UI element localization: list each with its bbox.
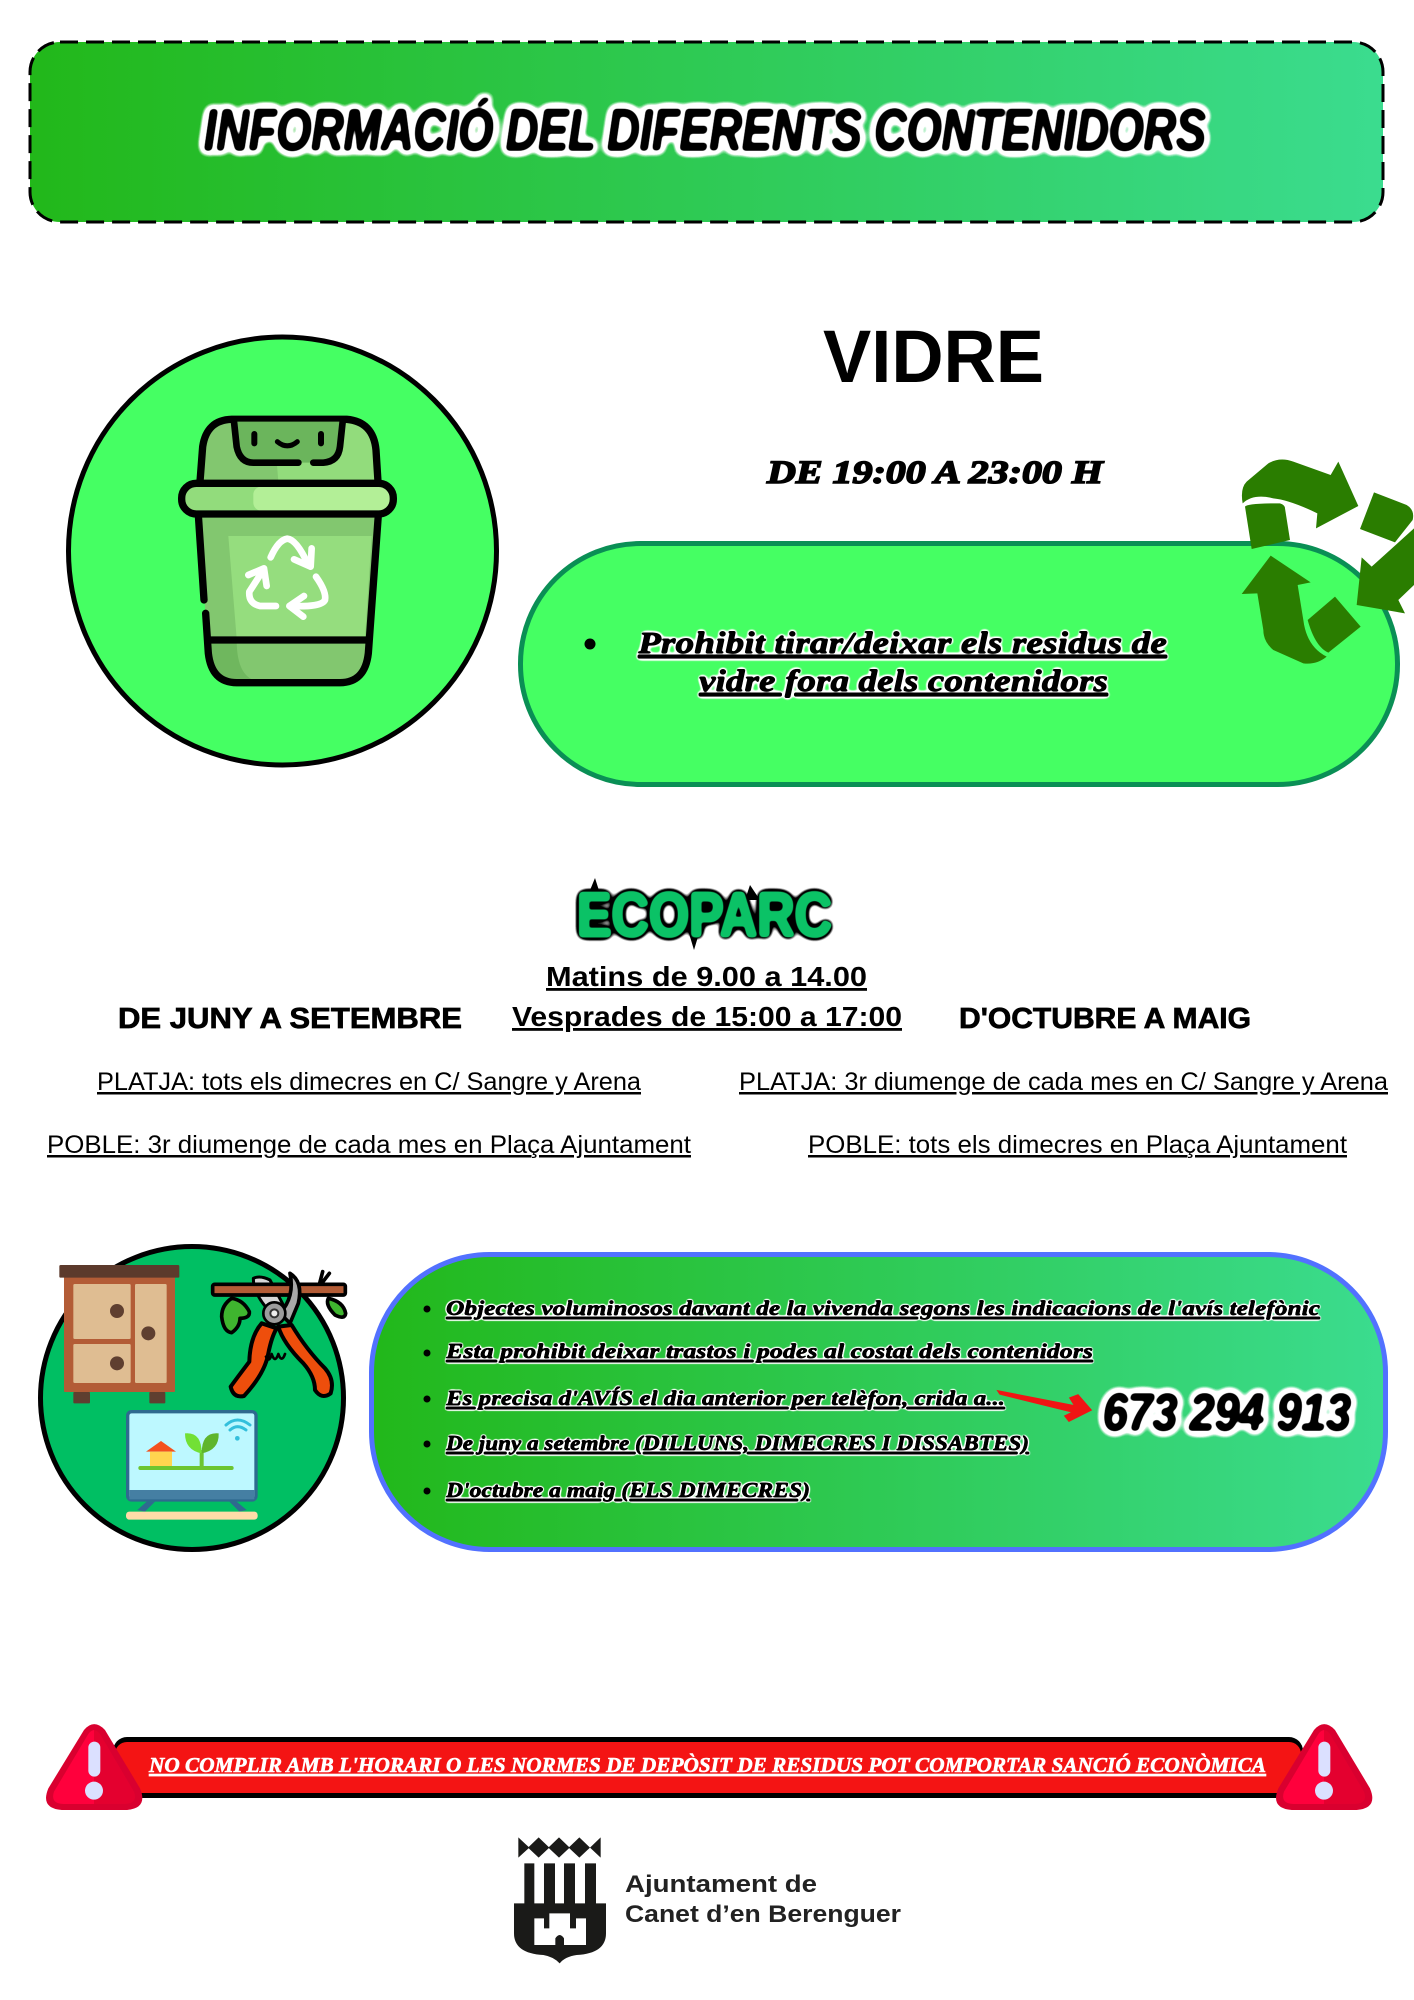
logo text: Ajuntament de — [625, 1871, 817, 1898]
summer schedule — [47, 1068, 691, 1159]
summer schedule: POBLE: 3r diumenge de cada mes en Plaça Ajuntament — [47, 1131, 691, 1159]
heading: ECOPARC: ECOPARC — [577, 881, 832, 950]
bullet list: D'octubre a maig (ELS DIMECRES) — [445, 1478, 810, 1502]
bullet list: Objectes voluminosos davant de la vivenda segons les indicacions de l'avís telefònic — [446, 1296, 1321, 1320]
icon: warning triangle left — [46, 1724, 142, 1810]
winter schedule: POBLE: tots els dimecres en Plaça Ajuntament — [808, 1131, 1347, 1159]
rule text — [637, 625, 1167, 698]
panel: glass rule — [520, 544, 1398, 784]
winter schedule: PLATJA: 3r diumenge de cada mes en C/ Sangre y Arena — [739, 1068, 1388, 1096]
icon: pruning shears — [213, 1272, 346, 1396]
schedule: glass: DE 19:00 A 23:00 H — [766, 455, 1105, 491]
icon: green recycling bin — [182, 419, 393, 683]
opening hours — [512, 961, 902, 1032]
icon: recycling arrows — [1242, 460, 1414, 664]
panel: bulky items illustration — [40, 1246, 346, 1550]
rule text: vidre fora dels contenidors — [699, 663, 1108, 698]
bullet — [584, 638, 596, 650]
bullet list: Esta prohibit deixar trastos i podes al costat dels contenidors — [445, 1339, 1093, 1363]
panel: glass container circle — [68, 337, 496, 765]
icon: cupboard — [59, 1265, 179, 1403]
rule text: Prohibit tirar/deixar els residus de — [637, 625, 1167, 660]
opening hours: Vesprades de 15:00 a 17:00 — [512, 1001, 902, 1032]
warning banner — [46, 1724, 1372, 1810]
bullet list: De juny a setembre (DILLUNS, DIMECRES I DISSABTES) — [445, 1431, 1029, 1455]
bullet list: Es precisa d'AVÍS el dia anterior per telèfon, crida a... — [445, 1386, 1005, 1410]
heading: VIDRE: VIDRE — [823, 315, 1044, 398]
season heading: summer: DE JUNY A SETEMBRE — [118, 1003, 462, 1035]
winter schedule — [739, 1068, 1388, 1159]
icon: coat of arms — [514, 1837, 606, 1963]
bullet list — [424, 1296, 1321, 1502]
panel: bulky items rules — [372, 1254, 1386, 1550]
icon: warning triangle right — [1276, 1724, 1372, 1810]
logo text — [625, 1871, 901, 1928]
warning text: NO COMPLIR AMB L'HORARI O LES NORMES DE DEPÒSIT DE RESIDUS POT COMPORTAR SANCIÓ ECONÒMICA — [148, 1753, 1266, 1777]
icon: television — [126, 1412, 258, 1520]
logo: Ajuntament de Canet d'en Berenguer — [514, 1837, 901, 1963]
title banner — [30, 42, 1383, 222]
opening hours: Matins de 9.00 a 14.00 — [546, 961, 867, 992]
logo text: Canet d’en Berenguer — [625, 1901, 901, 1928]
summer schedule: PLATJA: tots els dimecres en C/ Sangre y Arena — [97, 1068, 641, 1096]
phone number: 673 294 913 — [1103, 1384, 1351, 1442]
season heading: winter: D'OCTUBRE A MAIG — [959, 1003, 1251, 1035]
arrow: to phone number — [998, 1391, 1091, 1421]
